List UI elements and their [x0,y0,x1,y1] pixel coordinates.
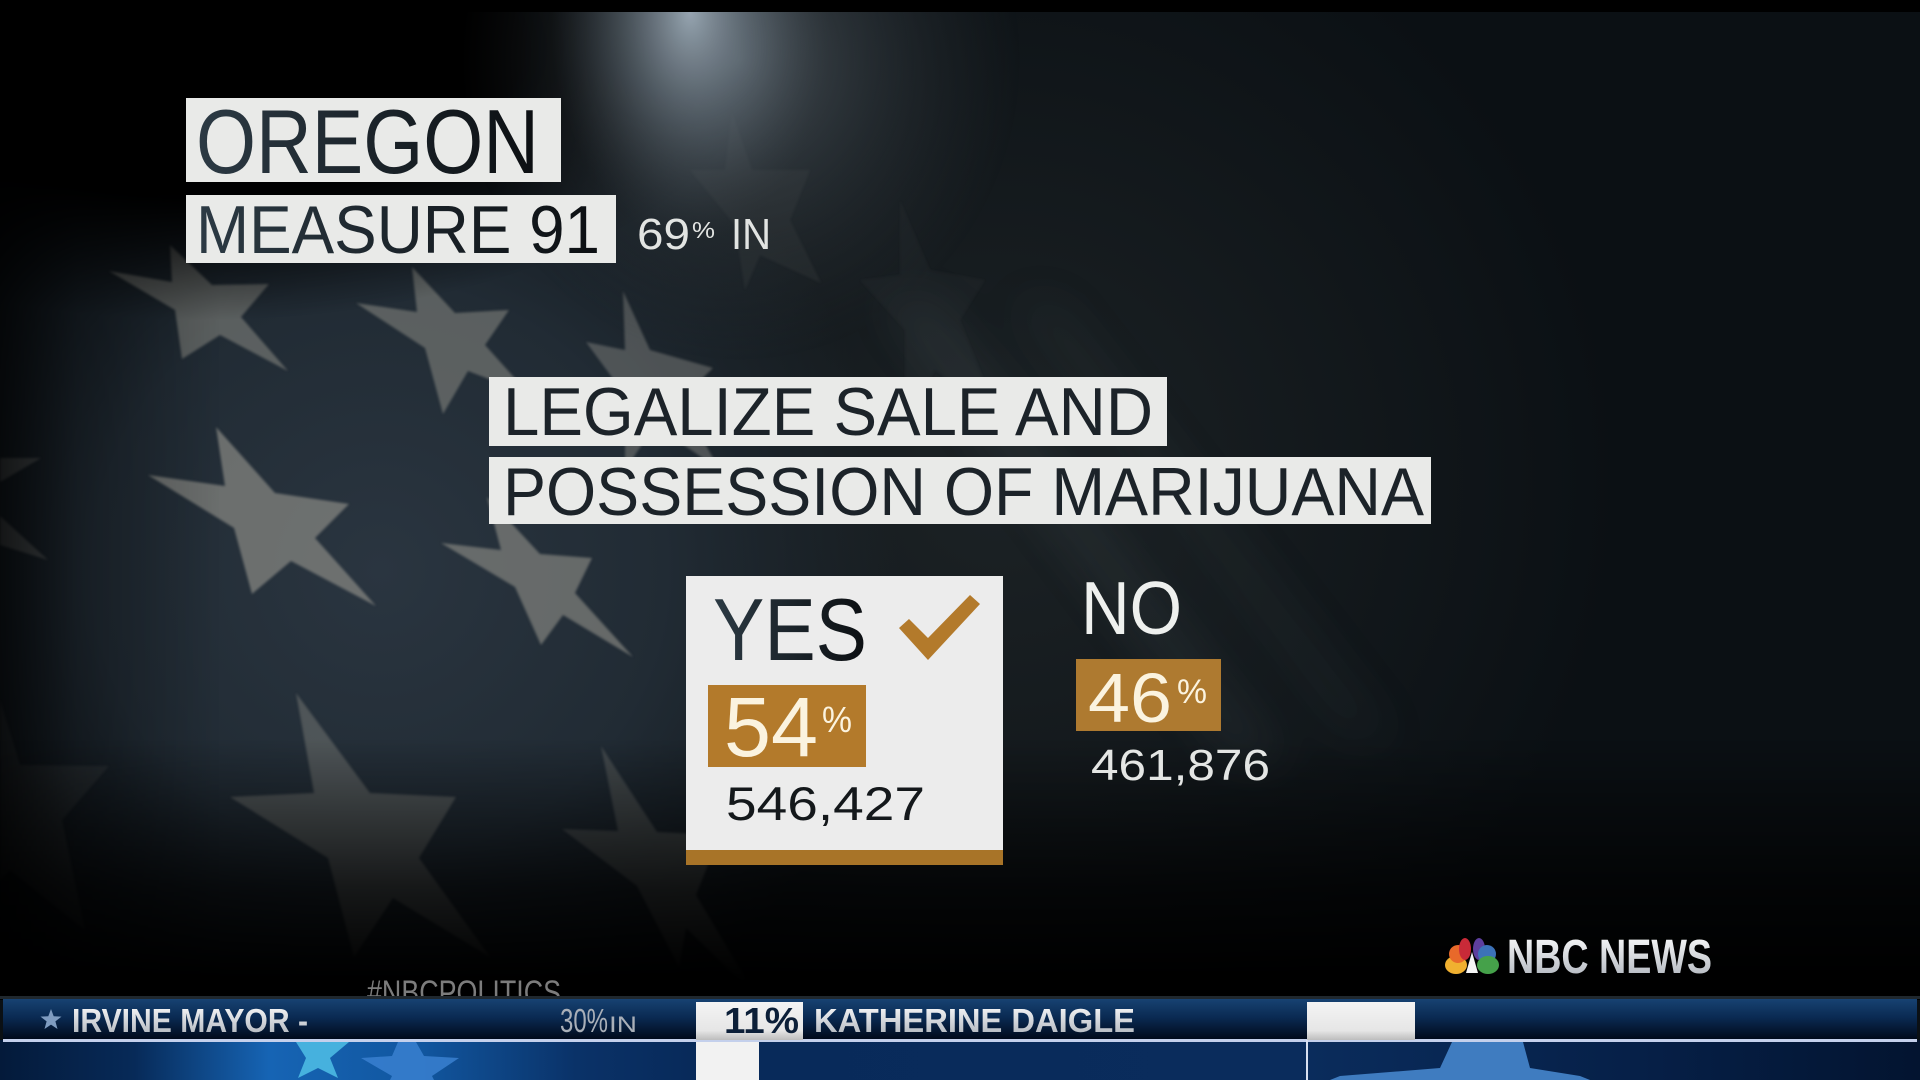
yes label: YES [713,580,867,679]
no percentage: 46 [1088,659,1172,737]
no percentage: % [1177,673,1207,711]
logo: NBC News: NBC NEWS [1507,931,1712,984]
empty white result box [1307,1002,1415,1040]
question text block [489,374,1431,530]
candidate percent box [696,1000,803,1080]
top black bar [0,0,1920,12]
no vote count: 461,876 [1091,741,1270,790]
lower blue strip with stars [0,1040,1920,1080]
precincts reporting: 69% in: % [692,217,715,243]
panel: yes result [686,576,1003,865]
icon: peacock [1445,938,1500,974]
ticker band [0,996,1920,1080]
candidate percent box: 11% [724,1000,799,1041]
candidate name: KATHERINE DAIGLE [814,1002,1135,1039]
heading: Oregon: OREGON [196,92,539,193]
precincts reporting: 69% in: 69 [637,210,690,259]
yes vote count: 546,427 [726,777,925,830]
no percentage [1076,659,1221,737]
precincts reporting: 69% in: IN [731,210,771,259]
heading: Measure 91: MEASURE 91 [196,192,600,268]
race name: IRVINE MAYOR - [72,1002,308,1039]
race percent in: IN [609,1012,637,1037]
icon: star [40,1009,62,1029]
panel: no result [1076,566,1270,790]
yes percentage [708,680,866,774]
question text block: LEGALIZE SALE AND [503,374,1153,450]
hashtag: #NBCPOLITICS [367,974,561,1012]
stars on the flag [0,113,1000,996]
race percent in: 30% [560,1002,608,1039]
logo: NBC News [1445,931,1712,984]
no label: NO [1081,566,1182,650]
yes percentage: 54 [724,680,818,774]
icon: check mark [899,595,980,660]
light rays [880,300,1400,760]
precincts reporting: 69% in [637,210,771,259]
yes percentage: % [822,699,852,740]
question text block: POSSESSION OF MARIJUANA [503,454,1425,530]
